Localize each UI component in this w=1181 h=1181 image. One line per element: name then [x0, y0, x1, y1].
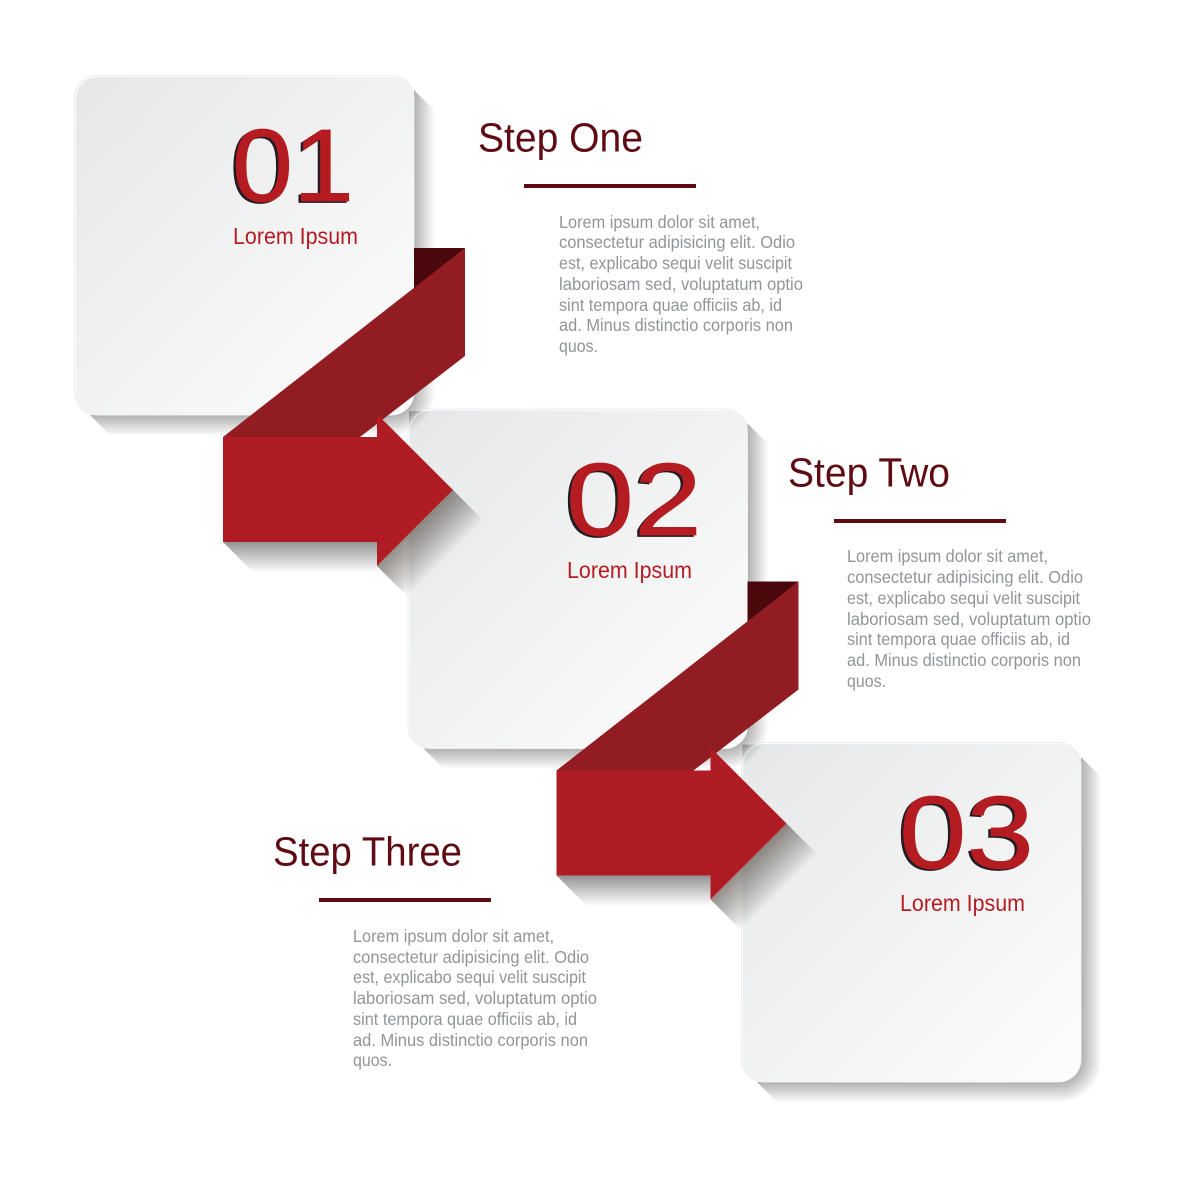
body: step three: sint tempora quae officiis ab, id: [353, 1009, 577, 1029]
card 01 label: Lorem Ipsum: [233, 223, 358, 249]
body: step three: quos.: [353, 1050, 392, 1070]
panel: card 03: [742, 742, 1102, 1103]
body: step two: est, explicabo sequi velit suscipit: [847, 588, 1080, 608]
card 03 label: Lorem Ipsum: [900, 890, 1025, 916]
heading rule: step two: [834, 519, 1006, 523]
body: step two: Lorem ipsum dolor sit amet,: [847, 546, 1048, 566]
body: step one: est, explicabo sequi velit suscipit: [559, 253, 792, 273]
card 02 label: Lorem Ipsum: [567, 557, 692, 583]
body: step one: consectetur adipisicing elit. Odio: [559, 232, 795, 252]
body: step three: consectetur adipisicing elit. Odio: [353, 947, 589, 967]
text block: step one: [478, 114, 808, 356]
body: step one: sint tempora quae officiis ab, id: [559, 295, 782, 315]
body: step one: laboriosam sed, voluptatum optio: [559, 274, 803, 294]
heading: step one: Step One: [478, 114, 643, 160]
body: step two: ad. Minus distinctio corporis non: [847, 650, 1081, 670]
heading: step two: Step Two: [788, 450, 950, 496]
number 02: 02: [566, 442, 702, 557]
number 03: 03: [899, 775, 1034, 890]
body: step two: quos.: [847, 671, 886, 691]
body: step one: Lorem ipsum dolor sit amet,: [559, 212, 760, 232]
text block: step two: [788, 450, 1096, 691]
body: step three: ad. Minus distinctio corporis non: [353, 1030, 588, 1050]
body: step three: Lorem ipsum dolor sit amet,: [353, 926, 554, 946]
arrow: ribbon from card 01 to card 02: [223, 248, 484, 597]
heading rule: step one: [524, 184, 696, 188]
body: step two: sint tempora quae officiis ab, id: [847, 629, 1070, 649]
number 01: 01: [232, 108, 354, 223]
body: step two: consectetur adipisicing elit. Odio: [847, 567, 1083, 587]
body: step two: laboriosam sed, voluptatum optio: [847, 609, 1091, 629]
body: step three: laboriosam sed, voluptatum optio: [353, 988, 597, 1008]
panel: card 01: [74, 76, 435, 436]
body: step three: est, explicabo sequi velit suscipit: [353, 967, 586, 987]
body: step one: quos.: [559, 336, 598, 356]
heading: step three: Step Three: [273, 828, 462, 874]
arrow: ribbon from card 02 to card 03: [556, 582, 818, 930]
heading rule: step three: [319, 898, 491, 902]
body: step one: ad. Minus distinctio corporis non: [559, 315, 793, 335]
text block: step three: [273, 828, 602, 1070]
panel: card 02: [408, 409, 768, 770]
